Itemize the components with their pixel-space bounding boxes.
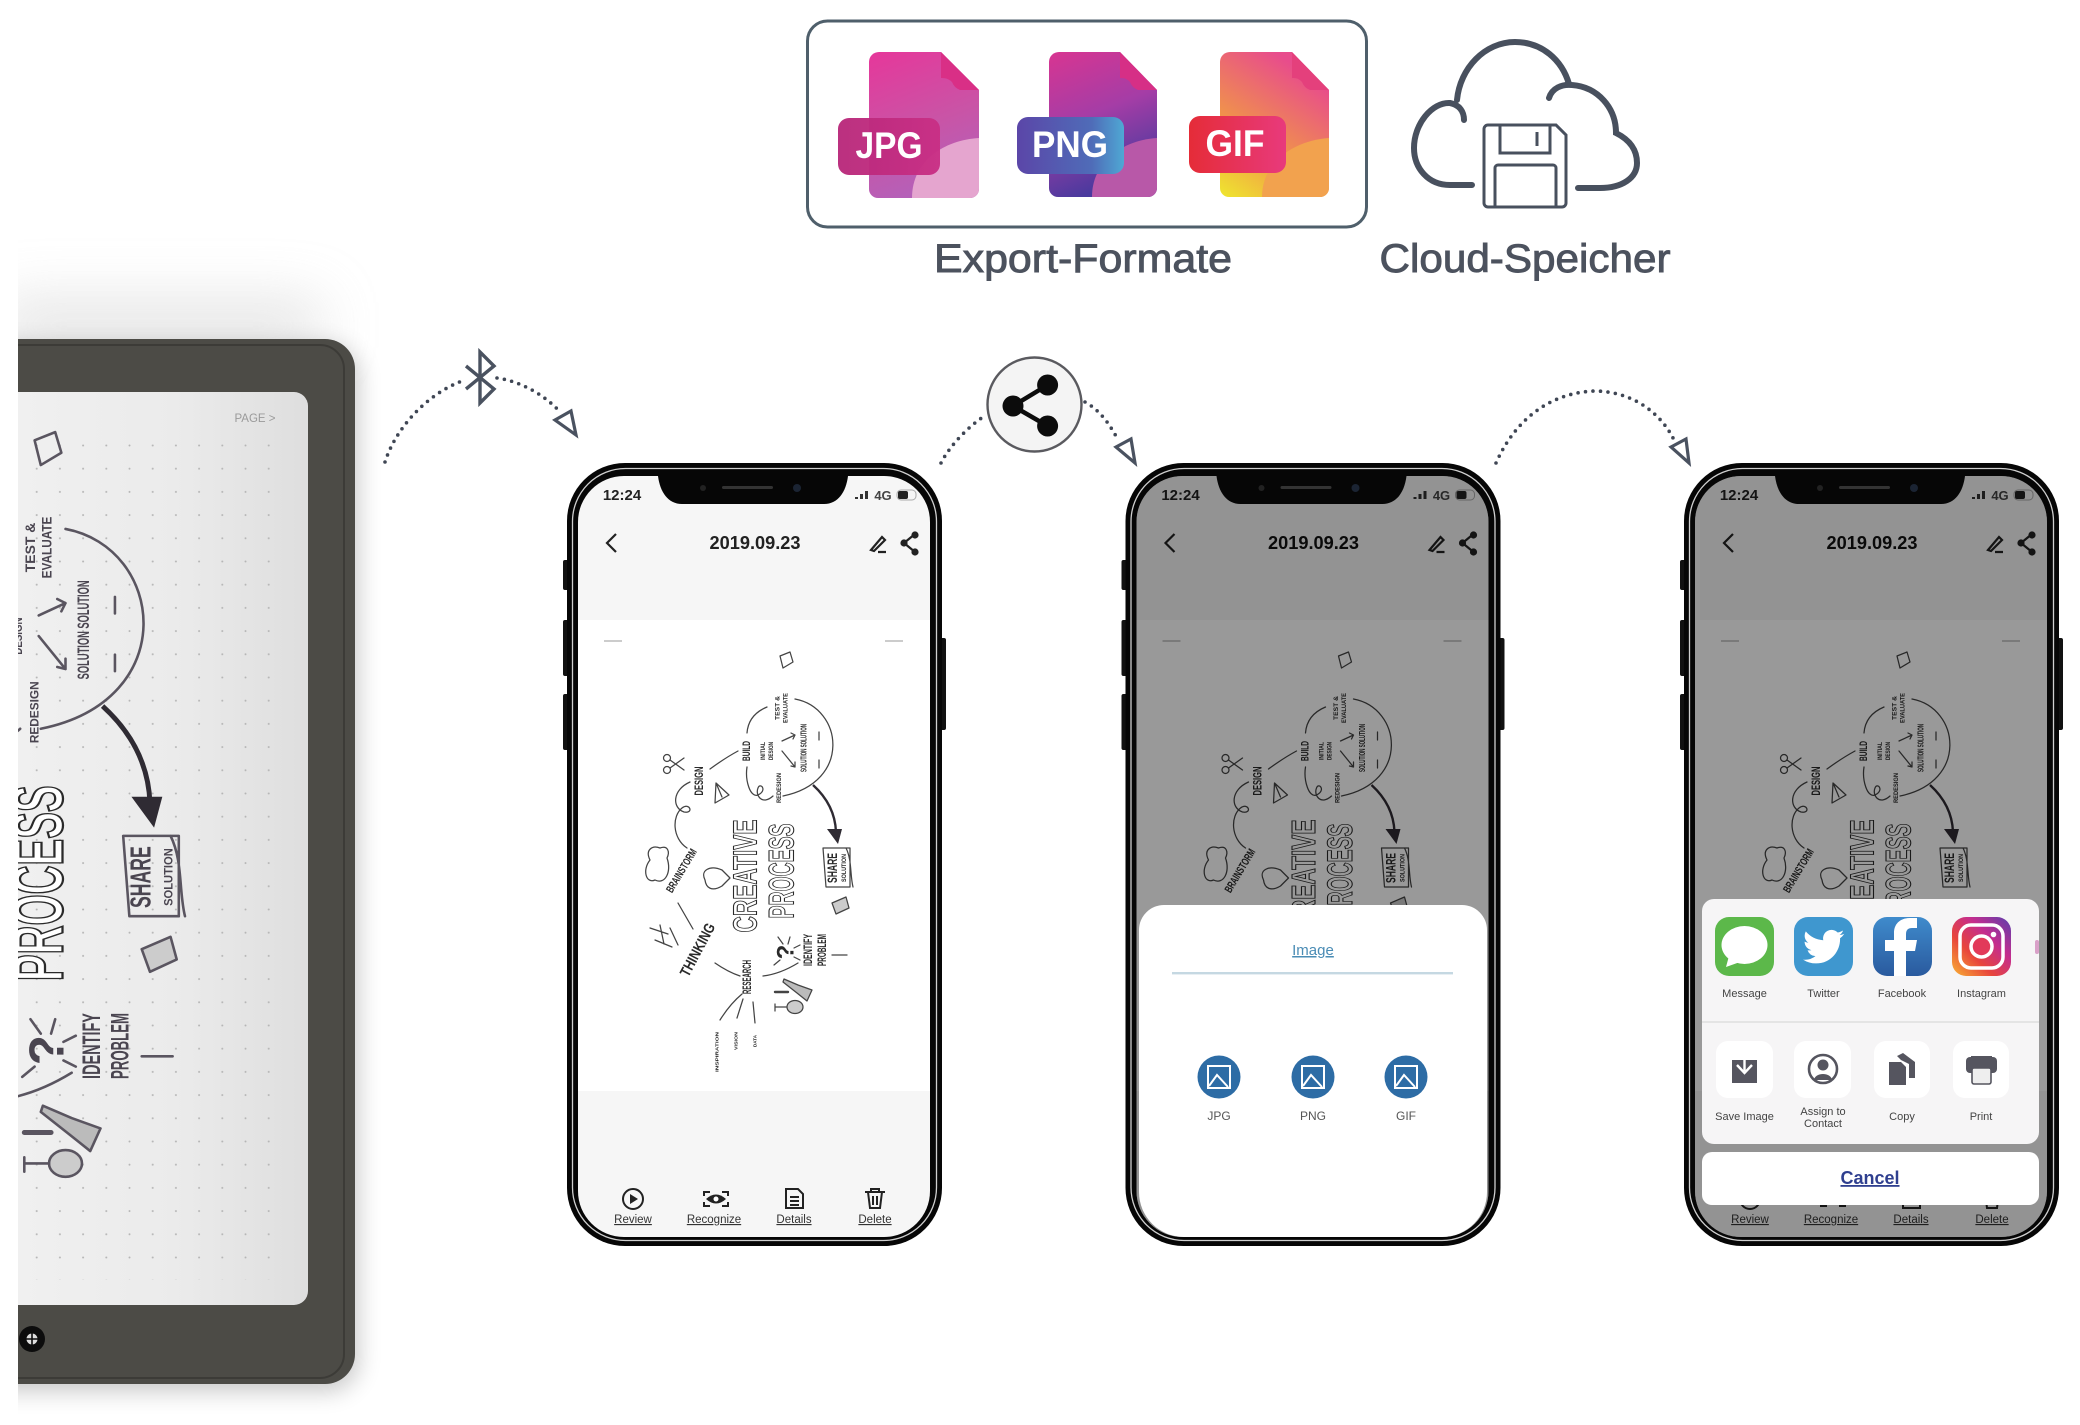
sketch: creative process mind map: EVALUATE [782, 692, 790, 723]
sketch: creative process mind map: TEST & [774, 696, 782, 720]
sketch: creative process mind map: DATA [752, 1034, 758, 1047]
status time: 12:24 [603, 487, 642, 504]
icon: twitter: Twitter [1807, 988, 1840, 1000]
sketch on tablet: creative process mind map: SOLUTION SOLUTION [75, 580, 93, 679]
icon: instagram [1952, 917, 2011, 1000]
sketch: creative process mind map: BRAINSTORM [664, 847, 700, 895]
toolbar, dimmed and partly covered: Delete [1975, 1214, 2009, 1226]
sketch: creative process mind map, dimmed: SOLUTION SOLUTION [1358, 724, 1367, 772]
action: save image [1715, 1041, 1774, 1123]
panel: phone two, export dialog: 4G [1433, 488, 1450, 503]
sketch: creative process mind map, dimmed and partly covered: TEST & [1892, 696, 1898, 720]
note date: 2019.09.23 [710, 533, 800, 553]
sketch: creative process mind map, dimmed and partly covered: INITIAL [1878, 742, 1884, 760]
panel: phone one, note view [563, 463, 946, 1246]
tablet button [19, 1326, 45, 1352]
status icons: 4G [874, 488, 892, 503]
icon: GIF option: GIF [1396, 1109, 1416, 1123]
sketch on tablet: creative process mind map: PROCESS [0, 785, 79, 981]
icon: facebook [1873, 917, 1932, 1000]
sketch: creative process mind map, dimmed: REDESIGN [1336, 773, 1342, 803]
action: copy: Copy [1889, 1111, 1915, 1123]
sketch: creative process mind map: PROCESS [762, 824, 802, 918]
sketch on tablet: creative process mind map: DESIGN [11, 617, 25, 655]
header icons [607, 532, 918, 554]
panel: phone three, share sheet: 4G [1991, 488, 2009, 503]
sketch: creative process mind map: BUILD [741, 741, 753, 761]
sketch: creative process mind map: THINKING [677, 920, 719, 980]
sketch: creative process mind map: DESIGN [769, 742, 775, 760]
icon: PNG file [1017, 52, 1157, 197]
panel: phone two, export dialog [1122, 463, 1504, 1246]
toolbar: review, recognize, details, delete [614, 1189, 892, 1226]
icon: GIF file [1189, 52, 1329, 197]
sketch: creative process mind map: REDESIGN [777, 773, 783, 803]
sketch on tablet: creative process mind map: ? [19, 1035, 74, 1065]
sketch on tablet: creative process mind map [18, 430, 186, 1178]
sketch: creative process mind map: CREATIVE [726, 820, 764, 932]
panel: tablet device [0, 230, 358, 1425]
icon: message [1715, 917, 1774, 1000]
icon: facebook: Facebook [1878, 988, 1927, 1000]
sketch: creative process mind map: DESIGN [692, 766, 706, 796]
action: assign to contact: Contact [1804, 1118, 1842, 1130]
sketch: creative process mind map: SOLUTION [842, 854, 848, 882]
sketch: creative process mind map, dimmed and partly covered: SHARE [1941, 853, 1957, 883]
sketch: creative process mind map, dimmed and partly covered [1762, 651, 1971, 899]
sketch: creative process mind map, dimmed and partly covered: CREATIVE [1844, 820, 1880, 932]
sketch on tablet: creative process mind map: SHARE [126, 846, 158, 908]
heading: cloud storage: Cloud-Speicher [1380, 237, 1670, 281]
toolbar, dimmed and partly covered: Review [1731, 1214, 1770, 1226]
heading: export formats: Export-Formate [934, 237, 1232, 281]
icon: bluetooth [466, 352, 494, 403]
sketch on tablet: creative process mind map: PROBLEM [108, 1013, 135, 1079]
sketch: creative process mind map: PROBLEM [815, 934, 829, 966]
icon: GIF file: GIF [1206, 123, 1264, 164]
sketch on tablet: creative process mind map: TEST & [23, 522, 38, 572]
icon: PNG option: PNG [1300, 1109, 1326, 1123]
panel: phone three, share sheet: 12:24 [1720, 487, 1759, 504]
icon: PNG option [1292, 1056, 1334, 1123]
sketch: creative process mind map, dimmed and partly covered: PROCESS [1880, 824, 1918, 918]
sketch: creative process mind map, dimmed and partly covered: REDESIGN [1894, 773, 1900, 803]
status icons [855, 490, 916, 500]
sketch: creative process mind map: VISION [734, 1032, 738, 1050]
sketch: creative process mind map, dimmed: INITIAL [1320, 742, 1326, 760]
cancel button [1702, 1152, 2039, 1205]
sketch: creative process mind map, dimmed and partly covered: SOLUTION SOLUTION [1916, 724, 1926, 772]
icon: JPG file: JPG [856, 125, 922, 166]
page number label: PAGE > [234, 413, 276, 425]
sketch: creative process mind map: SOLUTION SOLUTION [800, 724, 808, 772]
sketch: creative process mind map, dimmed and partly covered: BRAINSTORM [1781, 847, 1817, 895]
toolbar: review, recognize, details, delete: Recognize [687, 1214, 741, 1226]
arrow: tablet to phone via bluetooth [385, 378, 576, 462]
sketch: creative process mind map, dimmed: DESIGN [1250, 766, 1264, 796]
toolbar: review, recognize, details, delete: Review [614, 1214, 653, 1226]
sketch: creative process mind map: IDENTIFY [801, 934, 815, 966]
sketch: creative process mind map, dimmed: EVALUATE [1341, 692, 1348, 723]
sketch: creative process mind map, dimmed: BRAINSTORM [1223, 847, 1258, 895]
icon: JPG option: JPG [1207, 1109, 1231, 1123]
panel: phone two, export dialog: 2019.09.23 [1268, 533, 1359, 553]
sketch: creative process mind map: INITIAL [761, 742, 767, 760]
sketch: creative process mind map, dimmed [1204, 652, 1412, 932]
sketch on tablet: creative process mind map: SOLUTION [162, 848, 176, 906]
action: assign to contact [1794, 1041, 1851, 1130]
icon: GIF option [1384, 1056, 1428, 1123]
sketch: creative process mind map, dimmed: TEST & [1333, 696, 1340, 720]
icon: message: Message [1722, 988, 1767, 1000]
toolbar, dimmed and partly covered [1731, 1205, 2009, 1226]
icon: JPG file [838, 52, 979, 198]
toolbar, dimmed and partly covered: Recognize [1804, 1214, 1858, 1226]
sketch: creative process mind map, dimmed and partly covered: DESIGN [1809, 766, 1823, 796]
sketch: creative process mind map: SHARE [824, 853, 840, 883]
sketch: creative process mind map: RESEARCH [740, 960, 754, 994]
action: print [1953, 1041, 2009, 1123]
sketch: creative process mind map, dimmed: SOLUTION [1400, 854, 1406, 882]
icon: instagram: Instagram [1957, 988, 2006, 1000]
action: save image: Save Image [1715, 1111, 1774, 1123]
page markers [604, 640, 903, 642]
sketch: creative process mind map, dimmed: PROCESS [1321, 824, 1360, 918]
sketch: creative process mind map, dimmed and partly covered: SOLUTION [1959, 854, 1965, 882]
icon: cloud storage [1414, 42, 1637, 207]
arrow: phone one to phone two via share [941, 402, 1135, 463]
sketch on tablet: creative process mind map: EVALUATE [39, 517, 54, 578]
action: assign to contact: Assign to [1800, 1106, 1846, 1118]
toolbar, dimmed and partly covered: Details [1893, 1214, 1929, 1226]
sketch: creative process mind map, dimmed: CREATIVE [1285, 820, 1322, 932]
sketch: creative process mind map: ? [772, 945, 800, 959]
icon: PNG file: PNG [1032, 124, 1108, 165]
sketch: creative process mind map, dimmed: BUILD [1300, 741, 1312, 761]
sketch: creative process mind map, dimmed and partly covered: EVALUATE [1900, 692, 1906, 723]
sketch: creative process mind map [646, 652, 853, 1072]
sketch: creative process mind map, dimmed: DESIGN [1328, 742, 1334, 760]
export sheet [1139, 905, 1487, 1237]
sketch on tablet: creative process mind map: IDENTIFY [79, 1013, 106, 1079]
panel: export formats box [808, 21, 1366, 227]
action: print: Print [1970, 1111, 1992, 1123]
arrow: phone two to phone three [1496, 391, 1689, 463]
icon: JPG option [1198, 1056, 1240, 1123]
share sheet [1702, 899, 2039, 1205]
action: copy [1874, 1041, 1930, 1123]
panel: phone three, share sheet [1680, 463, 2063, 1246]
notch [658, 476, 848, 504]
sketch on tablet: creative process mind map: REDESIGN [28, 681, 42, 743]
toolbar: review, recognize, details, delete: Delete [858, 1214, 892, 1226]
panel: phone three, share sheet: 2019.09.23 [1826, 533, 1918, 553]
panel: phone two, export dialog: 12:24 [1161, 487, 1200, 504]
cancel button: Cancel [1840, 1168, 1900, 1188]
icon: share [988, 358, 1082, 452]
toolbar: review, recognize, details, delete: Details [776, 1214, 812, 1226]
sketch: creative process mind map, dimmed: SHARE [1382, 853, 1398, 883]
sketch: creative process mind map, dimmed and partly covered: DESIGN [1886, 742, 1892, 760]
icon: twitter [1794, 917, 1853, 1000]
tab label: image: Image [1292, 942, 1334, 959]
sketch: creative process mind map, dimmed and partly covered: BUILD [1858, 741, 1870, 761]
sketch: creative process mind map: INSPIRATION [714, 1032, 720, 1072]
